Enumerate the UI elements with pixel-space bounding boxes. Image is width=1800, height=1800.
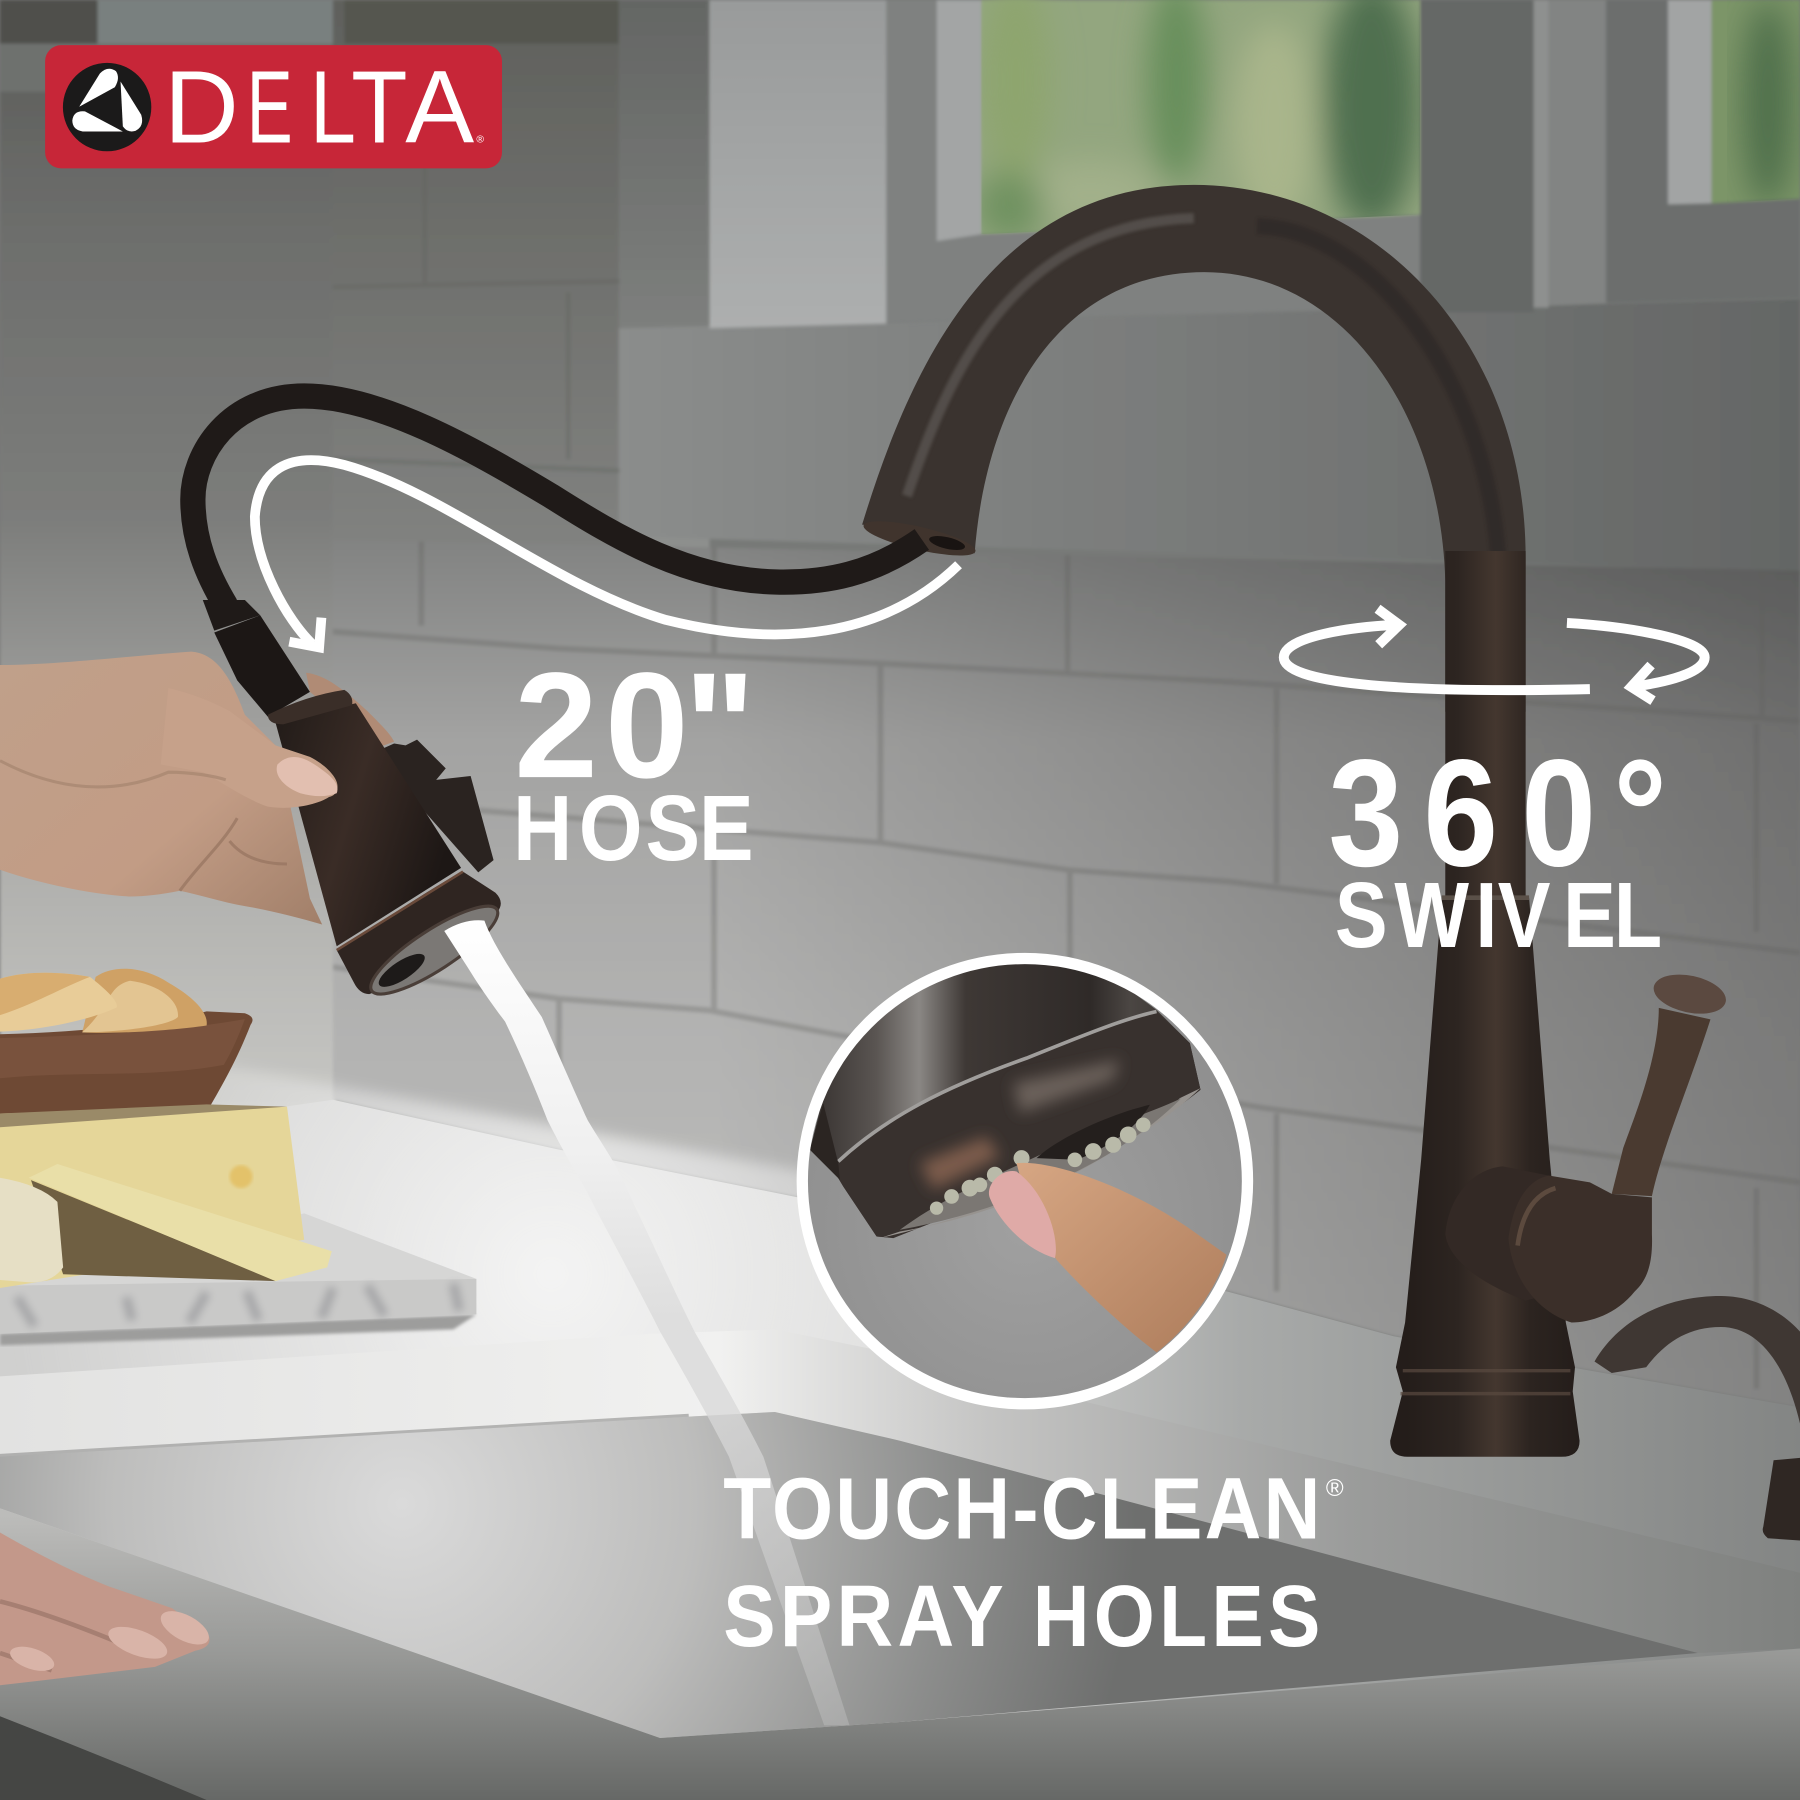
cheese block xyxy=(0,1107,304,1288)
label: touch-clean spray holes: TOUCH-CLEAN xyxy=(723,1459,1320,1557)
Delta logo badge xyxy=(45,45,502,168)
inset spray face xyxy=(880,1088,1201,1238)
window view: blurred trees xyxy=(976,0,1420,241)
wordmark xyxy=(164,48,484,164)
fingers behind head xyxy=(306,673,394,747)
soft cheese xyxy=(0,1178,63,1282)
inset ring xyxy=(802,959,1247,1404)
inset circle: touch-clean spray holes xyxy=(802,950,1247,1404)
faucet body xyxy=(1390,898,1580,1457)
handle hub xyxy=(1445,1166,1549,1301)
label: 360 swivel: 360° xyxy=(1328,729,1667,898)
faucet xyxy=(861,185,1800,1541)
nozzles xyxy=(930,1117,1151,1215)
faucet neck xyxy=(1445,551,1526,898)
arrow: hose reach xyxy=(255,460,959,647)
counter and sink xyxy=(0,1056,1800,1800)
braided hose xyxy=(193,396,922,606)
label: 20 inch hose: HOSE xyxy=(513,776,754,880)
bowl xyxy=(0,1011,253,1115)
spray body xyxy=(275,703,461,946)
wordmark: L xyxy=(310,48,356,164)
fingernail xyxy=(277,757,337,796)
wordmark: E xyxy=(247,48,293,164)
spray ring xyxy=(337,872,501,994)
board shadow xyxy=(0,1314,476,1345)
logo mark xyxy=(63,63,151,151)
spray buttons xyxy=(373,740,494,872)
fingernail xyxy=(989,1171,1056,1258)
spray face xyxy=(361,893,508,1007)
side spout xyxy=(1595,1296,1800,1423)
arrows: 360 swivel xyxy=(1284,609,1705,701)
cheese and board xyxy=(0,1104,476,1345)
side base xyxy=(1763,1458,1800,1541)
hand xyxy=(0,652,322,924)
inset background xyxy=(802,959,1247,1404)
label: 20 inch hose: 20" xyxy=(514,641,755,809)
handle body xyxy=(1508,1176,1652,1322)
inset spray body xyxy=(810,950,1201,1238)
wordmark: T xyxy=(351,48,408,164)
wordmark: A xyxy=(405,48,474,164)
hose coupling xyxy=(203,600,260,631)
lower hand on sink xyxy=(0,1533,214,1685)
label: 360 swivel: SWIVEL xyxy=(1335,864,1662,968)
bread xyxy=(82,969,207,1033)
front edge of counter xyxy=(0,1508,1800,1800)
window and frames xyxy=(709,0,1800,328)
cheese wedge xyxy=(31,1180,276,1281)
sink rim xyxy=(0,1329,1800,1653)
finger xyxy=(1017,1163,1227,1352)
background: kitchen wall xyxy=(0,0,1800,1406)
hand and spray head xyxy=(0,600,508,1007)
label: touch-clean spray holes: SPRAY HOLES xyxy=(723,1567,1320,1665)
handle lever xyxy=(1612,1008,1710,1196)
spout xyxy=(862,185,1526,712)
nails xyxy=(7,1604,214,1676)
wordmark: D xyxy=(164,48,239,164)
sink basin xyxy=(0,1412,1698,1738)
label: touch-clean spray holes: ® xyxy=(1326,1475,1344,1502)
inset spray ring xyxy=(838,1011,1201,1238)
spout tip xyxy=(861,514,978,562)
index finger xyxy=(161,688,338,808)
marble board xyxy=(0,1213,476,1288)
water stream xyxy=(444,920,849,1725)
wordmark: ® xyxy=(476,134,484,145)
label: touch-clean spray holes xyxy=(723,1459,1344,1665)
handle cap xyxy=(1650,969,1730,1020)
food: bread bowl xyxy=(0,969,253,1115)
